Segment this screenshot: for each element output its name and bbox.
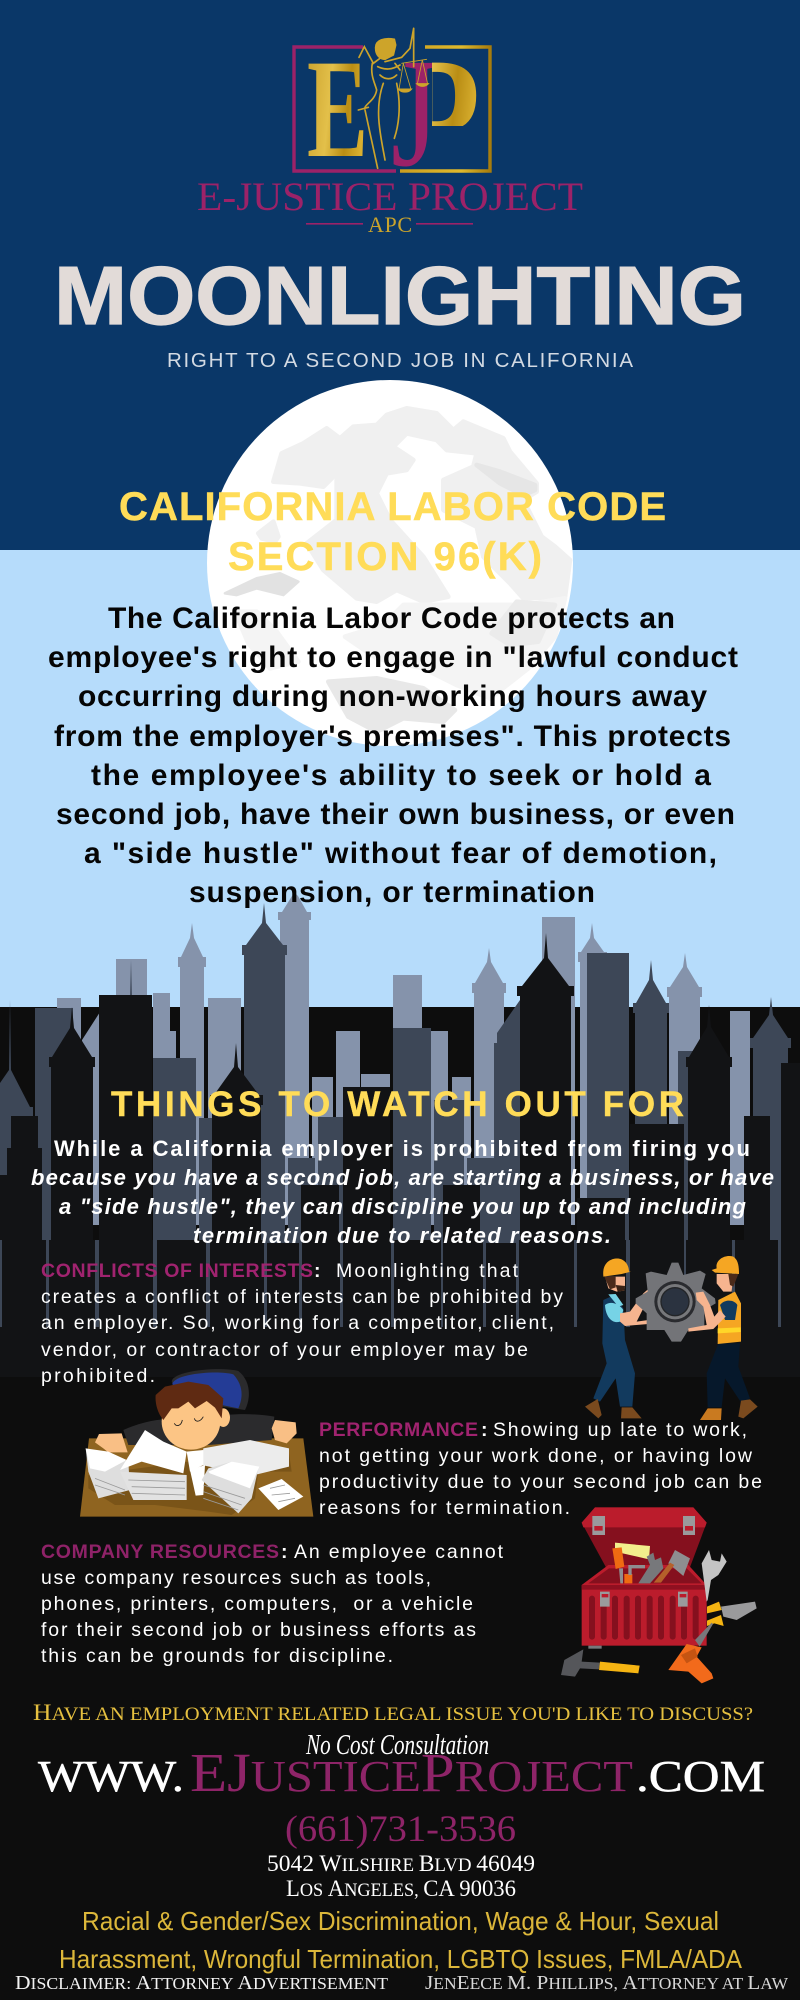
paper stacks (86, 1448, 130, 1498)
text block: company resources: phones, printers, computers, or a vehicle (41, 1593, 473, 1615)
text block: labor code explanation: occurring during non-working hours away (78, 680, 707, 713)
attorney name: JENEECE M. PHILLIPS, ATTORNEY AT LAW (425, 1972, 788, 1994)
website address: EJUSTICE PROJECT (190, 1742, 633, 1803)
icon: lady justice (358, 28, 428, 168)
logo frame (294, 47, 490, 171)
text block: conflicts of interests: : (314, 1260, 320, 1282)
text block: employer warning intro: While a California employer is prohibited from firing you (54, 1136, 750, 1161)
subtitle: RIGHT TO A SECOND JOB IN CALIFORNIA (167, 349, 633, 372)
text block: conflicts of interests: vendor, or contractor of your employer may be (41, 1339, 528, 1361)
text block: performance: Showing up late to work, (493, 1419, 747, 1441)
disclaimer: DISCLAIMER: ATTORNEY ADVERTISEMENT (15, 1972, 388, 1994)
text block: company resources: : (281, 1541, 288, 1563)
text block: labor code explanation: The California Labor Code protects an (108, 602, 675, 635)
text block: labor code explanation: a "side hustle" without fear of demotion, (84, 837, 717, 870)
icon: open red toolbox with tools (561, 1507, 757, 1683)
panel: sky background (0, 550, 800, 1007)
illustration: city skyline (0, 893, 800, 1377)
text block: performance: reasons for termination. (319, 1497, 570, 1519)
panel: dark lower background (0, 1007, 800, 2000)
text block: labor code explanation: suspension, or termination (189, 876, 595, 909)
heading: things to watch out for: THINGS TO WATCH OUT FOR (111, 1085, 684, 1124)
text block: performance: productivity due to your second job can be (319, 1471, 762, 1493)
chair (172, 1369, 249, 1410)
text block: conflicts of interests: CONFLICTS OF INTERESTS (41, 1260, 313, 1282)
icon: workers holding a gear (585, 1256, 758, 1420)
left worker (585, 1259, 656, 1418)
icon: tired worker asleep on paperwork (80, 1369, 313, 1517)
drill (668, 1644, 713, 1683)
wrench (702, 1550, 727, 1602)
head (162, 1394, 220, 1450)
text block: labor code explanation: employee's right to engage in "lawful conduct (48, 641, 738, 674)
logo letters: P (398, 23, 480, 211)
text block: conflicts of interests: prohibited. (41, 1365, 155, 1387)
text block: company resources (41, 1541, 504, 1667)
street address: LOS ANGELES, CA 90036 (286, 1876, 516, 1901)
middle row of buildings (0, 903, 791, 1327)
logo wordmark: E-JUSTICE PROJECT (197, 174, 583, 219)
website address (38, 1742, 765, 1803)
phone number: (661)731-3536 (285, 1809, 516, 1850)
text block: conflicts of interests: creates a conflict of interests can be prohibited by (41, 1286, 563, 1308)
gear (636, 1263, 716, 1342)
toolbox rim (582, 1565, 707, 1585)
logo letters: E (307, 31, 368, 187)
text block: labor code explanation: second job, have their own business, or even (56, 798, 735, 831)
text block: employer warning intro: termination due to related reasons. (193, 1223, 611, 1248)
text block: company resources: this can be grounds for discipline. (41, 1645, 393, 1667)
heading: California Labor Code: CALIFORNIA LABOR CODE (119, 485, 666, 529)
practice areas: Racial & Gender/Sex Discrimination, Wage & Hour, Sexual (82, 1906, 719, 1936)
text block: labor code explanation: the employee's ability to seek or hold a (91, 759, 711, 792)
text block: company resources: COMPANY RESOURCES (41, 1541, 279, 1563)
hands (95, 1420, 297, 1452)
text block: company resources: use company resources such as tools, (41, 1567, 431, 1589)
right worker (688, 1256, 758, 1420)
no cost consultation note: No Cost Consultation (305, 1729, 489, 1761)
text block: labor code explanation (48, 602, 738, 909)
hammer (561, 1649, 600, 1677)
logo letters: J (391, 26, 439, 199)
text block: employer warning intro (31, 1136, 774, 1248)
heading: California Labor Code: SECTION 96(K) (228, 535, 542, 579)
text block: performance: PERFORMANCE (319, 1419, 478, 1441)
text block: conflicts of interests (41, 1260, 563, 1387)
panel: navy header background (0, 0, 800, 550)
website address: .COM (636, 1752, 765, 1801)
text block: performance: : (481, 1419, 488, 1441)
text block: labor code explanation: from the employer's premises". This protects (54, 720, 731, 753)
toolbox body (582, 1585, 707, 1646)
text block: company resources: for their second job or business efforts as (41, 1619, 476, 1641)
street address (267, 1851, 535, 1901)
pliers (707, 1602, 724, 1626)
street address: 5042 WILSHIRE BLVD 46049 (267, 1851, 535, 1876)
text block: conflicts of interests: Moonlighting that (336, 1260, 519, 1282)
text block: employer warning intro: a "side hustle", they can discipline you up to and including (59, 1194, 747, 1219)
logo APC line: APC (368, 212, 412, 237)
practice areas: Harassment, Wrongful Termination, LGBTQ Issues, FMLA/ADA (59, 1944, 743, 1974)
website address: WWW. (38, 1752, 184, 1801)
text block: company resources: An employee cannot (294, 1541, 504, 1563)
desk (80, 1438, 313, 1517)
text block: performance (319, 1419, 762, 1519)
body (123, 1414, 274, 1445)
icon: full moon (207, 380, 573, 746)
logo letters (308, 62, 476, 166)
text block: conflicts of interests: an employer. So, working for a competitor, client, (41, 1312, 554, 1334)
tools inside toolbox (615, 1543, 650, 1559)
front row of buildings (0, 933, 800, 1377)
text block: performance: not getting your work done, or having low (319, 1445, 753, 1467)
text block: employer warning intro: because you have a second job, are starting a business, or have (31, 1165, 774, 1190)
lid (582, 1507, 707, 1572)
title: MOONLIGHTING (54, 249, 746, 342)
logo: E-Justice Project emblem (292, 28, 492, 173)
heading: California Labor Code (119, 485, 666, 579)
call to action question: HAVE AN EMPLOYMENT RELATED LEGAL ISSUE YOU'D LIKE TO DISCUSS? (33, 1700, 753, 1725)
back row of buildings (57, 893, 750, 1225)
practice areas (59, 1906, 743, 1974)
narrow gaps between front buildings (0, 1240, 781, 1327)
